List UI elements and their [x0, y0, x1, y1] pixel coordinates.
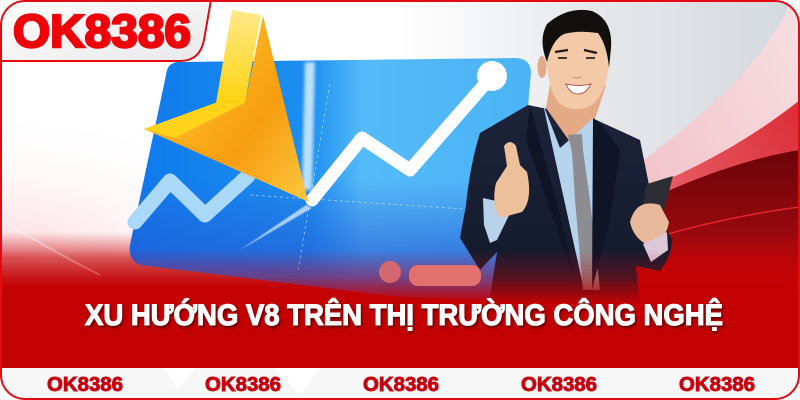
lower red band	[0, 304, 800, 370]
icon: gold arrow	[144, 10, 312, 250]
chart panel	[120, 58, 531, 300]
facial features	[555, 50, 597, 94]
shirt	[543, 104, 594, 290]
title: XU HƯỚNG V8 TRÊN THỊ TRƯỜNG CÔNG NGHỆ	[85, 298, 723, 332]
light streak	[2, 220, 100, 275]
footer brand 4: OK8386	[521, 374, 597, 396]
person	[460, 10, 673, 310]
background fade	[0, 232, 800, 308]
lapels	[526, 105, 569, 256]
tie	[568, 134, 600, 290]
hair	[542, 10, 611, 68]
chart line: front	[312, 76, 492, 200]
ear	[538, 56, 546, 78]
logo text: OK8386	[13, 5, 191, 57]
dashed guide	[250, 84, 480, 270]
red fade	[2, 253, 669, 304]
footer brand 3: OK8386	[363, 374, 439, 396]
neck	[546, 85, 606, 142]
logo badge	[0, 0, 211, 61]
background	[2, 2, 788, 260]
panel buttons	[379, 261, 481, 286]
chart line: back	[135, 176, 248, 222]
footer brand 2: OK8386	[205, 374, 281, 396]
left cuff and hand	[483, 142, 529, 243]
phone and right hand	[630, 176, 673, 262]
face	[546, 28, 609, 109]
footer brand 1: OK8386	[47, 374, 123, 396]
footer brand 5: OK8386	[679, 374, 755, 396]
ribbons: right	[636, 6, 798, 282]
jacket	[460, 105, 672, 310]
footer strip	[0, 368, 800, 400]
